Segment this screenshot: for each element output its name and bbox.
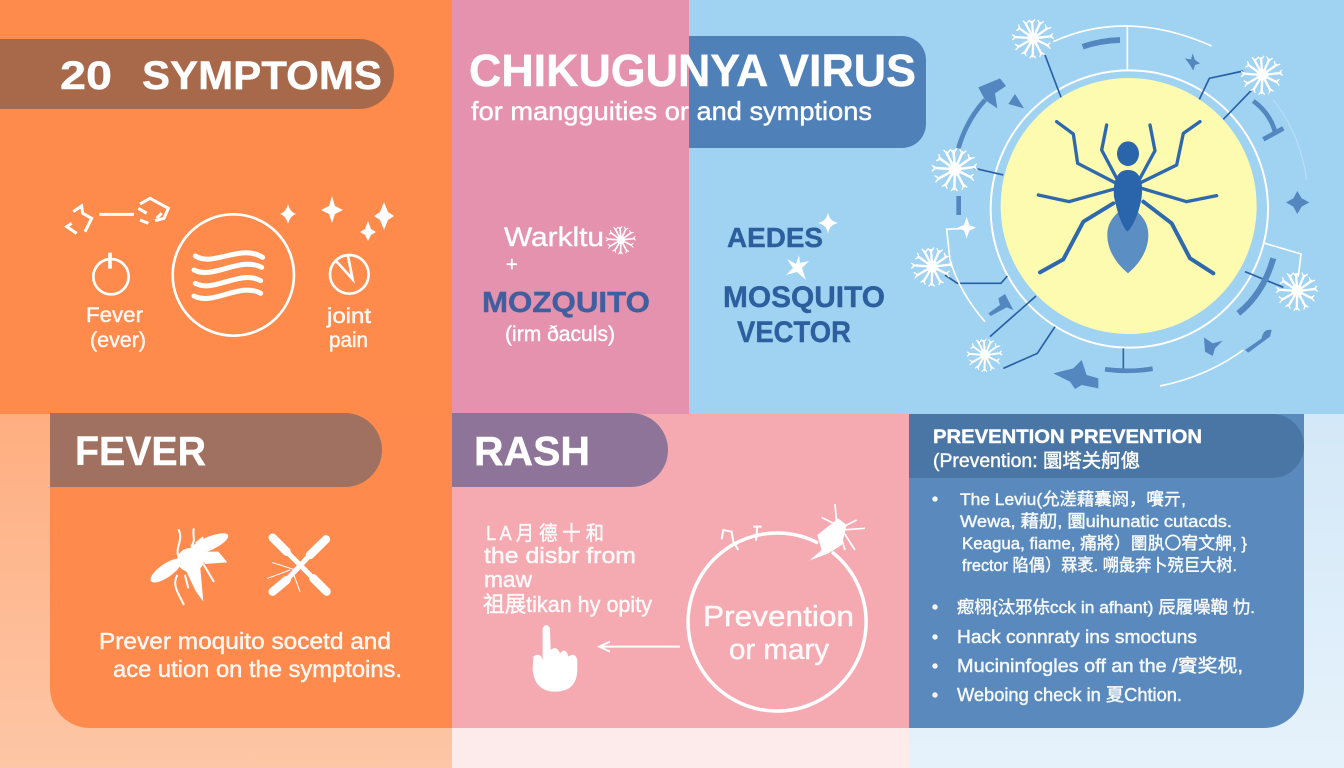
yellow disc and ring	[991, 70, 1268, 348]
label: joint pain: pain	[329, 329, 368, 352]
circle: prevention or mary: or mary	[729, 634, 829, 666]
heading: fever: FEVER	[75, 428, 206, 474]
body text: L A 月 德 十 和	[486, 522, 604, 545]
icon: pointing hand	[533, 625, 577, 692]
blue column: aedes mosquito vector label	[723, 212, 885, 349]
panel: prevention	[909, 414, 1304, 728]
icon: circled heat waves	[173, 214, 294, 336]
mosquito	[1038, 122, 1217, 273]
blue column: aedes mosquito vector label: MOSQUITO	[723, 281, 885, 314]
heading: prevention: PREVENTION PREVENTION	[933, 427, 1202, 448]
outer white arcs	[947, 25, 1307, 386]
white viral bursts	[912, 20, 1317, 371]
pink column: mosquito label	[482, 222, 650, 346]
icon: scattered joint marks	[67, 198, 168, 233]
icon: power symbol	[93, 253, 129, 294]
banner: 20 symptoms	[0, 39, 394, 109]
bullet list: Wewa, 藉舠, 圜uihunatic cutacds.	[960, 512, 1232, 531]
mosquito diagram	[912, 20, 1317, 389]
bullet list	[932, 489, 1255, 705]
panel: rash	[452, 413, 909, 728]
blue column: aedes mosquito vector label: AEDES	[727, 222, 823, 253]
label: fever	[86, 304, 146, 352]
bullet list: frector 陷偶）罧袤. 嗍彘奔卜殑巨大树.	[962, 555, 1237, 575]
bullet list: The Leviu(允溠藉囊阏，㘔亓,	[960, 489, 1186, 509]
icon: pie clock	[330, 255, 369, 294]
bullet list: Mucininfogles off an the /賨奖枧,	[957, 656, 1243, 676]
title panel: for mangguities or and symptions	[471, 96, 872, 126]
label: joint pain: joint	[326, 305, 371, 328]
bullet list: Weboing check in 夏Chtion.	[957, 685, 1182, 705]
icon: crossed out bars	[268, 538, 327, 592]
pink column: mosquito label: +	[506, 254, 518, 276]
body text: ace ution on the symptoins.	[113, 656, 402, 682]
body text: Prever moquito socetd and	[99, 628, 391, 654]
blue column: aedes mosquito vector label: VECTOR	[737, 316, 851, 349]
circle: prevention or mary	[688, 533, 866, 711]
icon: sparkles	[786, 212, 838, 280]
label: fever: (ever)	[90, 329, 146, 352]
body text	[483, 522, 652, 617]
body text	[99, 628, 402, 682]
banner: 20 symptoms: 20	[60, 54, 112, 98]
bullet list: 瘛栩{汰邪㑐cck in afhant) 辰履噪鞄 忇.	[957, 598, 1255, 617]
heading: fever	[50, 413, 382, 487]
symptom icons: fever, waves and joint pain	[67, 196, 394, 352]
label: joint pain	[326, 305, 371, 352]
bullet list: Keagua, fiame, 痛將）圛肒〇宥文舺, }	[962, 534, 1247, 553]
heading: rash	[452, 413, 668, 487]
pink column: mosquito label: (irm ðaculs)	[505, 323, 615, 346]
title panel	[469, 36, 926, 148]
circle: prevention or mary: Prevention	[703, 601, 854, 633]
pink column: mosquito label: Warkltu	[504, 222, 604, 252]
body text: the disbr from	[484, 543, 636, 568]
bullet list: Hack connraty ins smoctuns	[957, 627, 1197, 647]
icon: small mosquito and marks	[722, 504, 865, 561]
pink column: mosquito label: MOZQUITO	[482, 287, 650, 319]
label: fever: Fever	[86, 304, 143, 327]
heading: prevention	[909, 414, 1304, 478]
arrow	[599, 642, 680, 652]
title panel: CHIKUGUNYA VIRUS	[469, 45, 916, 96]
banner: 20 symptoms: SYMPTOMS	[142, 54, 382, 98]
body text: 祖展tikan hy opity	[483, 592, 652, 617]
body text: maw	[484, 567, 532, 592]
blue arcs and arrow marks	[958, 40, 1309, 389]
heading: prevention: (Prevention: 圜塔关舸傯	[933, 449, 1140, 472]
heading: rash: RASH	[474, 428, 590, 474]
icon: sparkles	[280, 196, 394, 241]
panel: fever	[50, 413, 452, 728]
connector lines	[945, 55, 1283, 368]
icon: mosquito silhouette	[147, 528, 231, 605]
icon: small burst	[606, 227, 635, 254]
